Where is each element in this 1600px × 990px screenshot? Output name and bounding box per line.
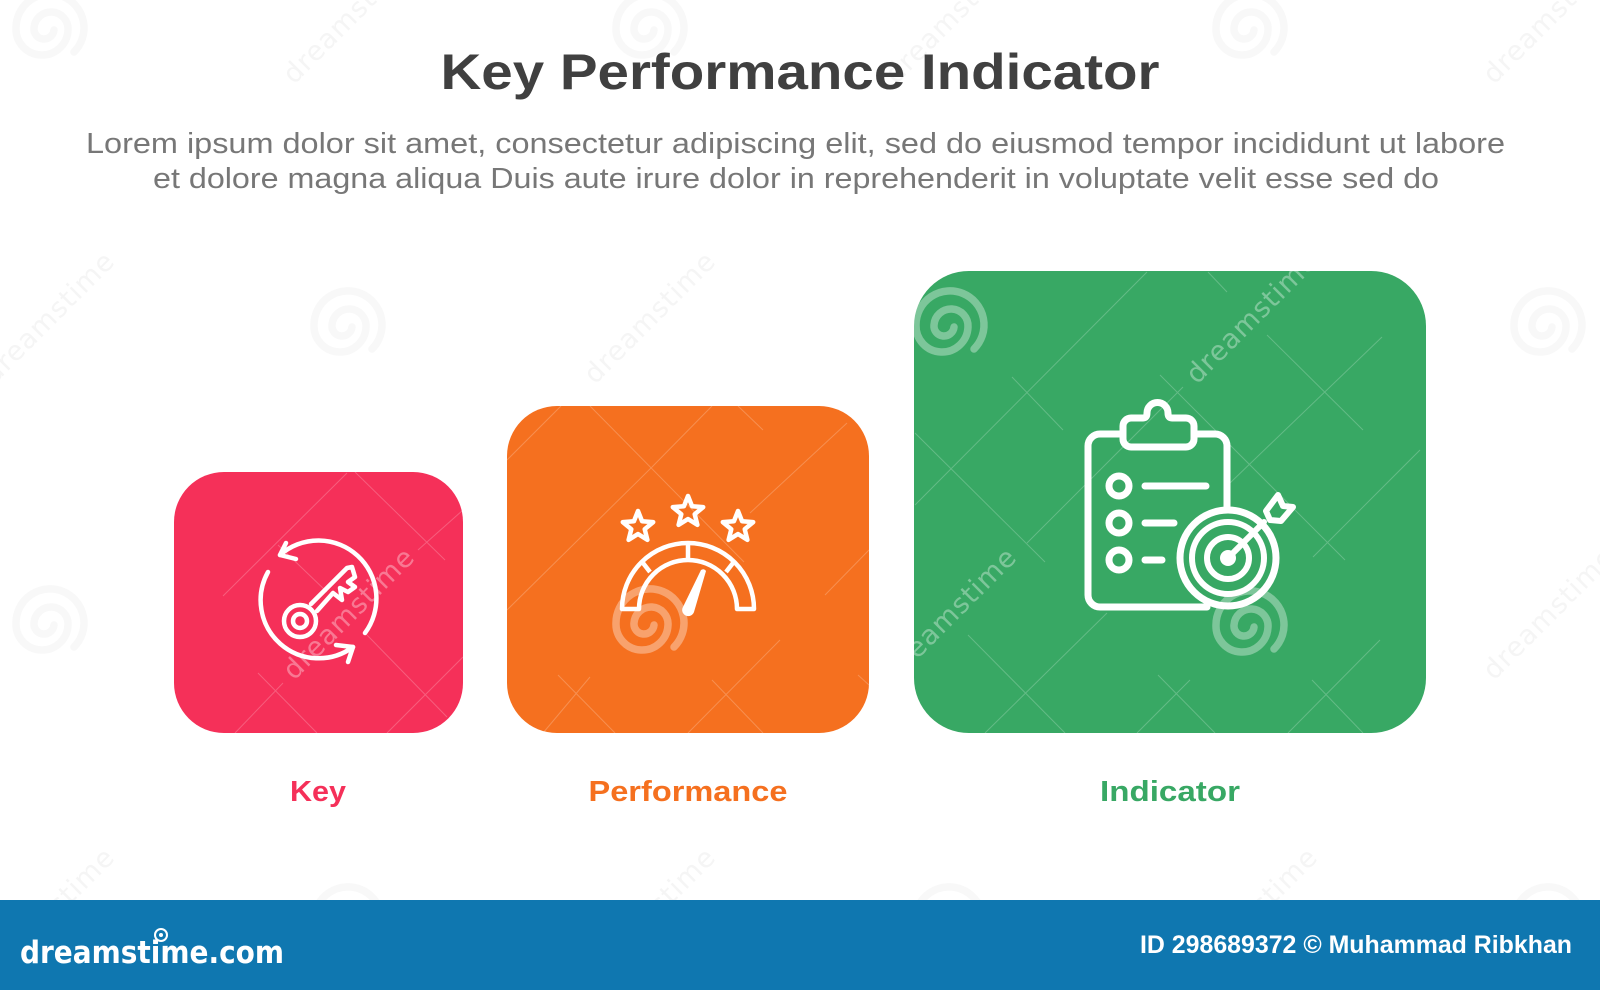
icon: key in rotating arrows xyxy=(261,540,376,662)
label: key: Key xyxy=(290,776,346,808)
infographic canvas: dreamstime xyxy=(277,542,421,686)
subtitle text block: Lorem ipsum dolor sit amet, consectetur adipiscing elit, sed do eiusmod tempor incididunt ut labore xyxy=(86,128,1505,160)
subtitle text block: et dolore magna aliqua Duis aute irure dolor in reprehenderit in voluptate velit esse sed do xyxy=(153,163,1439,195)
icon: gauge with stars xyxy=(622,496,754,616)
title: Key Performance Indicator xyxy=(440,44,1160,100)
panel: key xyxy=(174,472,463,808)
infographic canvas: dreamstime xyxy=(1180,842,1324,986)
infographic canvas: dreamstime xyxy=(578,246,722,390)
label: indicator: Indicator xyxy=(1100,776,1240,808)
panel: performance xyxy=(507,406,869,808)
label: performance: Performance xyxy=(588,776,788,808)
brand logo: dreamstime.com xyxy=(20,935,284,971)
infographic canvas: dreamstime xyxy=(879,542,1023,686)
infographic canvas: dreamstime xyxy=(1180,246,1324,390)
infographic canvas: dreamstime xyxy=(578,842,722,986)
footer banner xyxy=(0,900,1600,990)
image credit: ID 298689372 © Muhammad Ribkhan xyxy=(1140,931,1572,959)
icon: clipboard with target xyxy=(1088,403,1293,607)
panel: indicator xyxy=(914,271,1426,808)
subtitle text block xyxy=(86,128,1505,195)
